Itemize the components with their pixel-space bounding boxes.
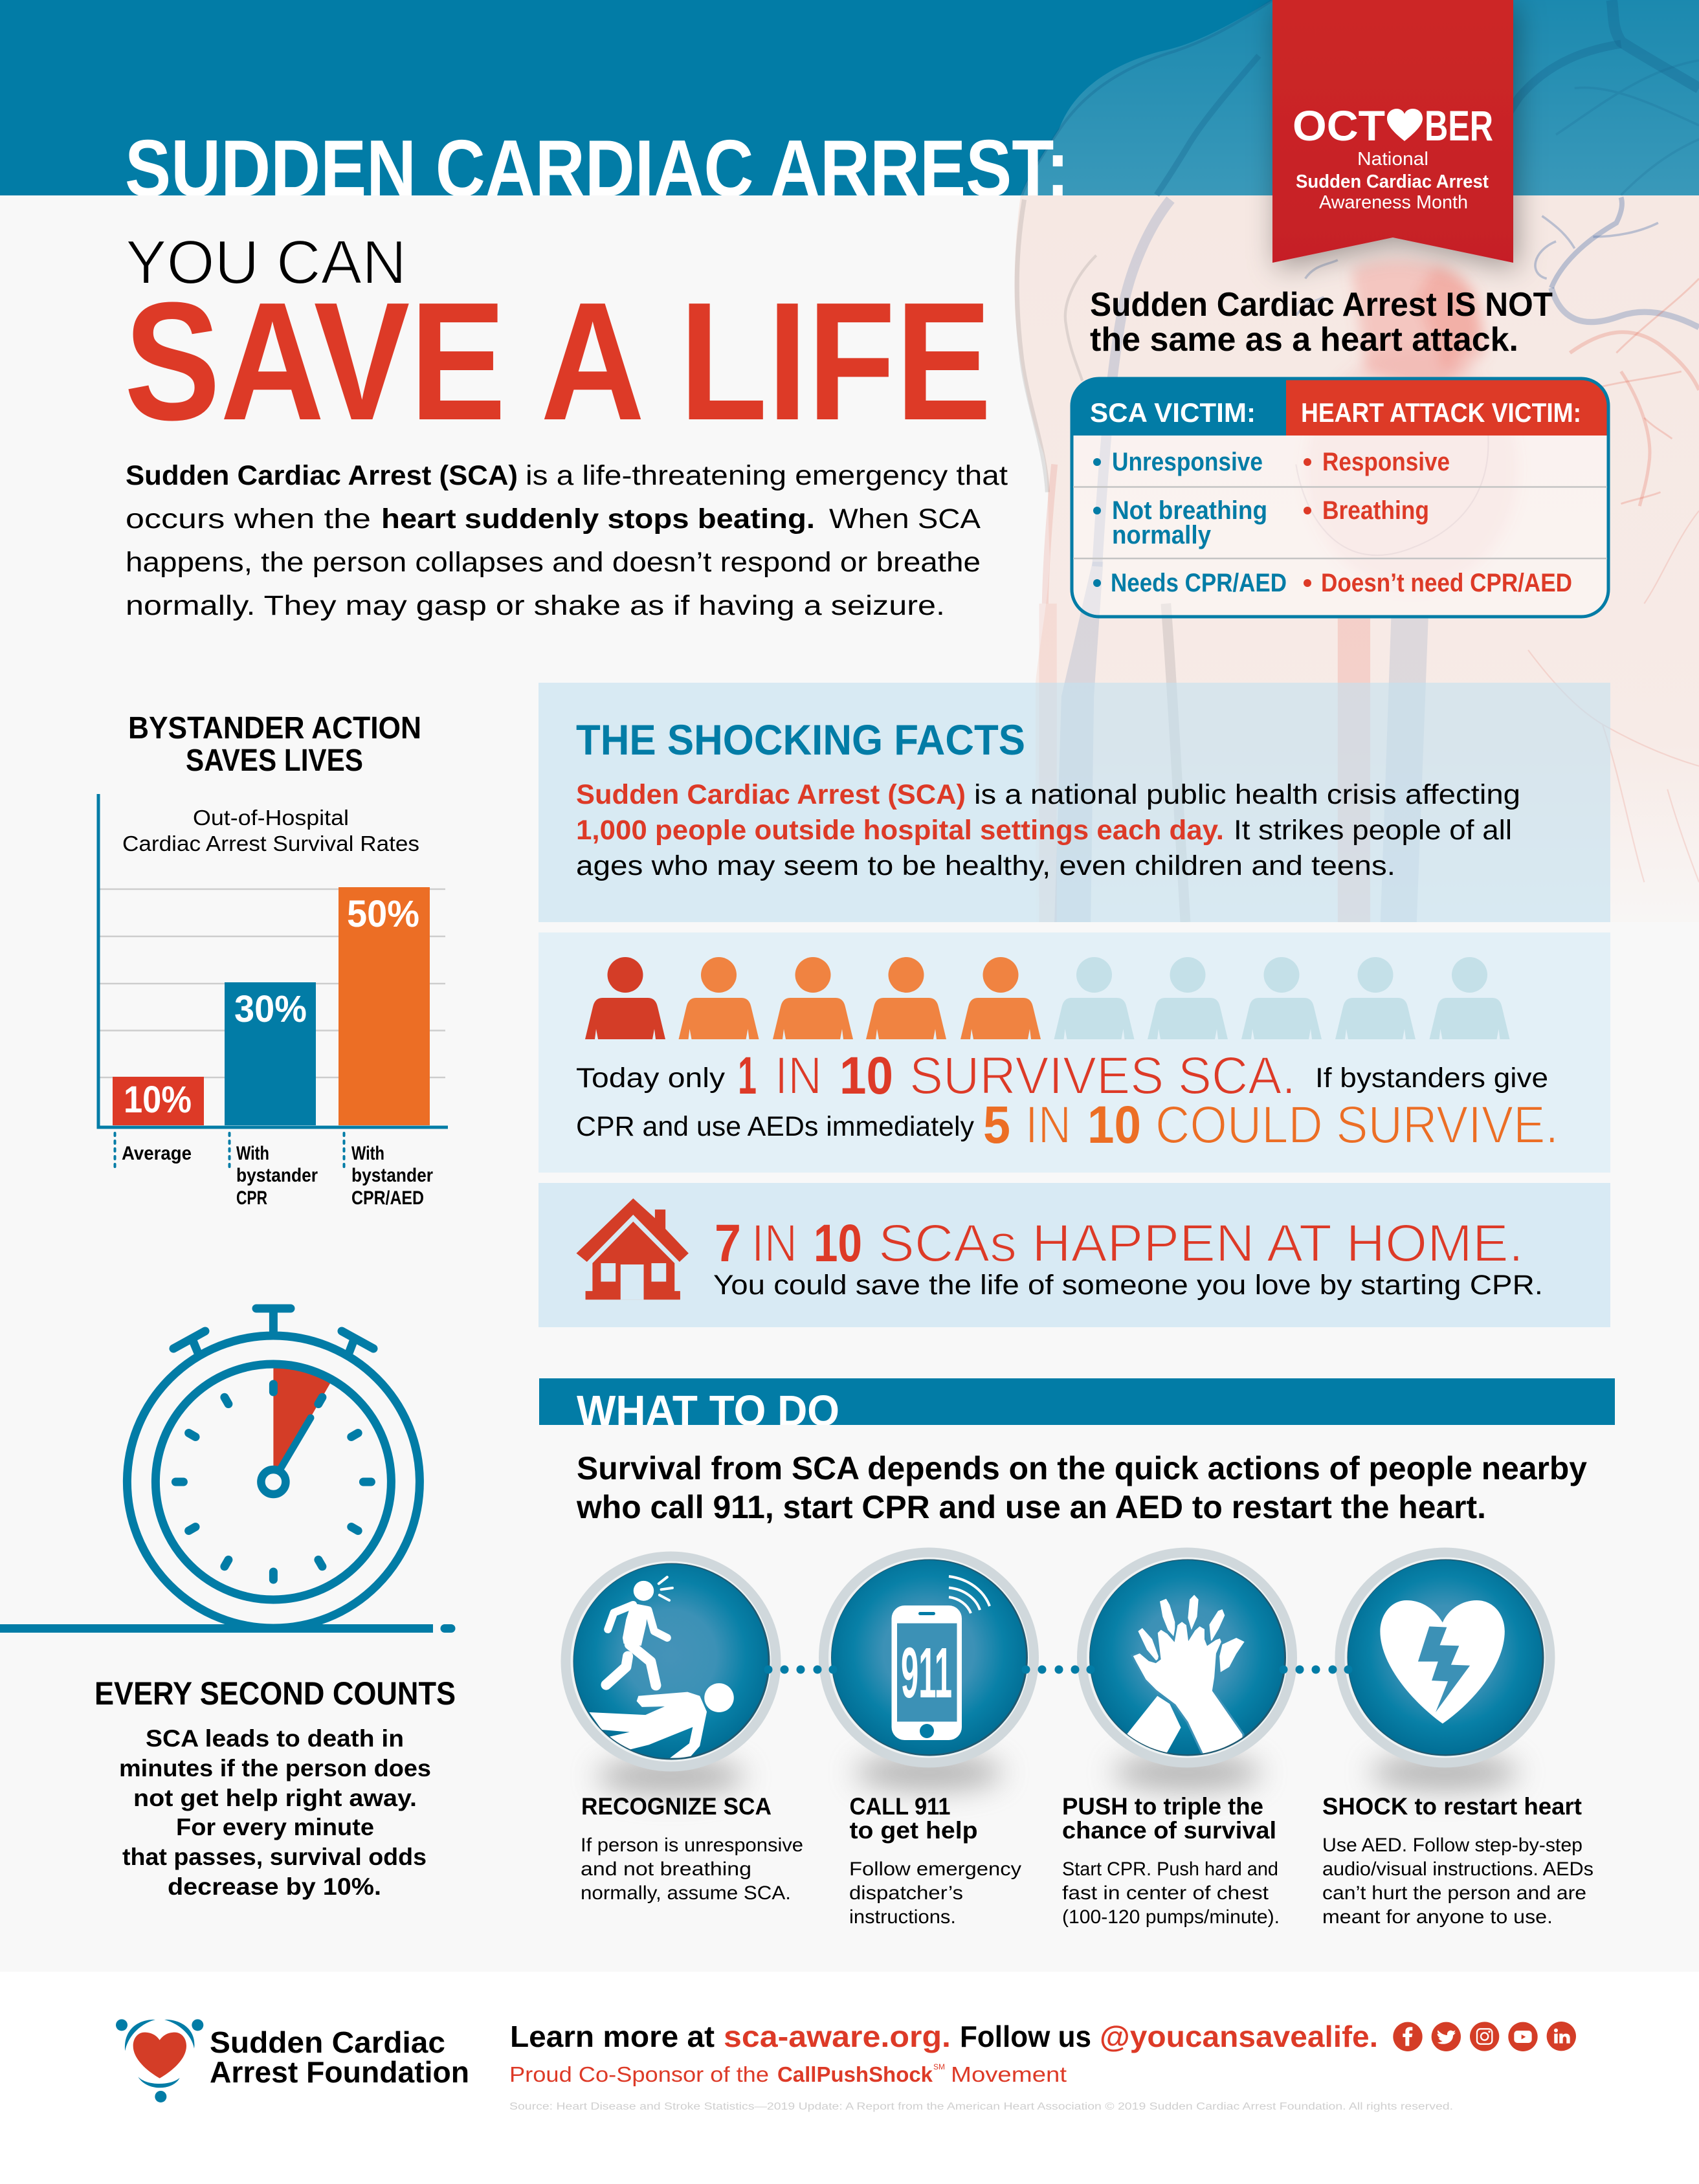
text: every second counts body [119,1725,431,1900]
step 4 text: audio/visual instructions. AEDs [1322,1859,1594,1880]
icon: aed heart with bolt [1335,1548,1555,1768]
ribbon: october awareness month: Awareness Month [1319,192,1468,213]
text: 5 in 10 could survive: CPR and use AEDs immediately [576,1111,974,1142]
text: every second counts body: not get help right away. [133,1785,417,1811]
step 4 heading: SHOCK to restart heart [1322,1793,1582,1820]
step 3 heading: PUSH to triple the [1062,1793,1263,1820]
icon: heart in october [1387,109,1423,141]
step 2 heading: to get help [849,1817,977,1844]
icon: stopwatch [0,1308,451,1628]
step 3 heading [1062,1793,1276,1844]
text: learn more and follow us: @youcansavealife. [1100,2020,1378,2053]
text: co-sponsor: Proud Co-Sponsor of the [509,2062,769,2086]
background illustration: heart anatomy [1014,0,1699,925]
step 2 text: dispatcher’s [849,1882,963,1904]
heading: sca is not a heart attack: Sudden Cardiac Arrest IS NOT [1090,286,1553,324]
chart heading: SAVES LIVES [186,744,363,778]
chart heading: BYSTANDER ACTION [128,711,421,745]
logo wordmark: Sudden Cardiac [210,2025,445,2059]
heart attack victim list: Doesn’t need CPR/AED [1321,569,1572,597]
text: source note: Source: Heart Disease and Stroke Statistics—2019 Update: A Report from the American Heart Association © 2019 Sudden Cardiac Arrest Foundation. All rights reserved. [509,2101,1453,2112]
text: 1 in 10 survives: SURVIVES SCA. [909,1046,1296,1105]
text: 5 in 10 could survive: 5 [983,1096,1010,1154]
step 2 text: instructions. [849,1906,956,1928]
sca victim list [1093,448,1287,597]
logo mark [116,2019,203,2102]
text: 7 in 10 scas happen at home: IN [751,1214,797,1273]
text: learn more and follow us: Follow us [960,2020,1091,2053]
step 1 text [581,1835,803,1904]
text: survival depends on quick actions: who call 911, start CPR and use an AED to restart the heart. [576,1489,1486,1525]
text: 7 in 10 scas happen at home: SCAs HAPPEN AT HOME. [878,1214,1524,1273]
heading: every second counts: EVERY SECOND COUNTS [94,1675,456,1712]
heading banner: what to do [539,1378,1615,1425]
intro paragraph: When SCA [829,503,981,535]
text: 1 in 10 survives: 1 [738,1046,757,1105]
icon: recognize sca [561,1552,781,1772]
chart subtitle [122,806,419,855]
icon: row of ten people [585,957,1509,1039]
sca victim list: Unresponsive [1112,448,1263,476]
step 1 heading: RECOGNIZE SCA [581,1793,772,1820]
facts paragraph [576,779,1520,881]
sca victim list: Not breathing [1112,496,1267,525]
step 2: call 911 [819,1548,1039,1928]
ribbon: october awareness month: OCT [1293,102,1385,149]
text: every second counts body: SCA leads to death in [146,1725,404,1752]
bar labels: Average [122,1143,192,1164]
step 2 text: Follow emergency [849,1859,1021,1880]
panel: survival statistics [539,932,1610,1173]
chart subtitle: Cardiac Arrest Survival Rates [122,832,419,855]
bar: with bystander cpr 30%: 30% [234,988,307,1030]
step 1 text: normally, assume SCA. [581,1882,791,1904]
logo wordmark: Arrest Foundation [210,2055,469,2089]
text: survival depends on quick actions [576,1450,1587,1525]
dotted connectors between steps [764,1666,1353,1673]
text: every second counts body: For every minute [176,1814,374,1840]
text: 1 in 10 survives [576,1046,1548,1105]
facts paragraph: 1,000 people outside hospital settings each day. [576,815,1224,846]
text: every second counts body: decrease by 10%. [168,1873,381,1900]
heading: you can: YOU CAN [126,228,406,297]
text: co-sponsor: SM [933,2062,945,2071]
text: 1 in 10 survives: If bystanders give [1315,1063,1548,1094]
text: survival depends on quick actions: Survival from SCA depends on the quick actions of people nearby [577,1450,1587,1486]
panel: scas happen at home [539,1183,1610,1327]
text: learn more and follow us: sca-aware.org. [724,2020,951,2053]
text: learn more and follow us: Learn more at [510,2020,715,2053]
heart attack victim list: Responsive [1322,448,1450,476]
heading: sca is not a heart attack [1090,286,1553,358]
text: 5 in 10 could survive: COULD SURVIVE. [1155,1096,1559,1154]
step 3 text: fast in center of chest [1062,1882,1269,1904]
step 4 text: meant for anyone to use. [1322,1906,1553,1928]
text: 1 in 10 survives: IN [775,1046,822,1105]
text: 1 in 10 survives: Today only [576,1063,726,1094]
text: 7 in 10 scas happen at home: 7 [715,1214,741,1273]
heading: save a life: SAVE A LIFE [124,268,992,456]
panel: comparison table [1071,377,1610,617]
logo wordmark [210,2025,469,2089]
facts paragraph: It strikes people of all [1234,815,1512,846]
step 3 heading: chance of survival [1062,1817,1276,1844]
bar labels: With [236,1143,269,1164]
bar: average 10%: 10% [124,1079,192,1121]
panel: comparison table: SCA VICTIM: [1090,397,1256,428]
icon: phone calling 911: 911 [901,1633,952,1713]
heart attack victim list [1304,448,1572,597]
step 4 text: can’t hurt the person and are [1322,1882,1586,1904]
bar labels: bystander [351,1165,433,1186]
bar labels: bystander [236,1165,318,1186]
text: co-sponsor: CallPushShock [777,2062,933,2086]
logo: sudden cardiac arrest foundation [116,2019,469,2102]
step 3 text: (100-120 pumps/minute). [1062,1906,1280,1928]
step 1: recognize sca [561,1552,803,1904]
text: 1 in 10 survives: 10 [839,1046,893,1105]
text: 7 in 10 scas happen at home: 10 [814,1214,862,1273]
icon: phone calling 911 [819,1548,1039,1768]
step 2 heading: CALL 911 [849,1793,950,1820]
text: 5 in 10 could survive: 10 [1087,1096,1141,1154]
step 4 text [1322,1835,1594,1928]
bar labels [122,1143,433,1209]
panel: the shocking facts: THE SHOCKING FACTS [576,716,1025,764]
sca victim list: Needs CPR/AED [1111,569,1287,597]
bar labels: With [351,1143,384,1164]
ribbon: october awareness month [1272,0,1513,263]
text: 5 in 10 could survive [576,1096,1559,1154]
step 2 text [849,1859,1021,1928]
bar: with bystander cpr 30% [225,982,316,1125]
panel: the shocking facts [539,683,1610,922]
text: co-sponsor: Movement [951,2062,1067,2086]
facts paragraph: is a national public health crisis affecting [974,779,1520,810]
footer background [0,1972,1699,2184]
bar: with bystander cpr/aed 50%: 50% [347,893,419,935]
title: sudden cardiac arrest: SUDDEN CARDIAC ARREST: [125,124,1069,214]
chart heading [128,711,421,778]
ribbon: october awareness month: National [1357,149,1428,170]
ribbon: october awareness month: Sudden Cardiac Arrest [1296,171,1489,192]
step 3: push [1062,1548,1297,1928]
bar labels: CPR/AED [351,1187,424,1209]
intro paragraph: happens, the person collapses and doesn’t respond or breathe [126,547,981,578]
step 1 text: If person is unresponsive [581,1835,803,1856]
intro paragraph: heart suddenly stops beating. [381,503,815,535]
step 1 text: and not breathing [581,1859,751,1880]
bar labels: CPR [236,1187,267,1209]
facts paragraph: ages who may seem to be healthy, even children and teens. [576,850,1395,881]
heart attack victim list: Breathing [1322,496,1429,525]
step 3 text [1062,1859,1280,1928]
bar: with bystander cpr/aed 50% [339,887,430,1125]
chart subtitle: Out-of-Hospital [193,806,349,830]
intro paragraph [126,460,1008,621]
step 4: shock [1322,1548,1594,1928]
heading: sca is not a heart attack: the same as a heart attack. [1090,321,1518,358]
text: co-sponsor [509,2062,1067,2086]
icons: social media [1393,2022,1576,2051]
icon: cpr hands [1077,1548,1297,1768]
text: every second counts body: minutes if the person does [119,1755,431,1781]
panel: comparison table: HEART ATTACK VICTIM: [1301,397,1581,428]
facts paragraph: Sudden Cardiac Arrest (SCA) [576,779,966,810]
icon: house [576,1198,689,1299]
panel: bystander action chart [98,711,448,1209]
step 2 heading [849,1793,977,1844]
header band [0,0,1699,195]
step 4 text: Use AED. Follow step-by-step [1322,1835,1582,1856]
intro paragraph: is a life-threatening emergency that [526,460,1008,491]
heading banner: what to do: WHAT TO DO [577,1387,839,1435]
text: every second counts body: that passes, survival odds [122,1844,427,1870]
sca victim list: normally [1112,521,1212,549]
intro paragraph: normally. They may gasp or shake as if having a seizure. [126,590,945,621]
text: learn more and follow us [510,2020,1378,2053]
ribbon: october awareness month: BER [1425,102,1493,149]
text: 5 in 10 could survive: IN [1025,1096,1071,1154]
intro paragraph: Sudden Cardiac Arrest (SCA) [126,460,518,491]
step 3 text: Start CPR. Push hard and [1062,1859,1278,1880]
intro paragraph: occurs when the [126,503,371,535]
text: save someone you love: You could save the life of someone you love by starting CPR. [713,1270,1543,1301]
